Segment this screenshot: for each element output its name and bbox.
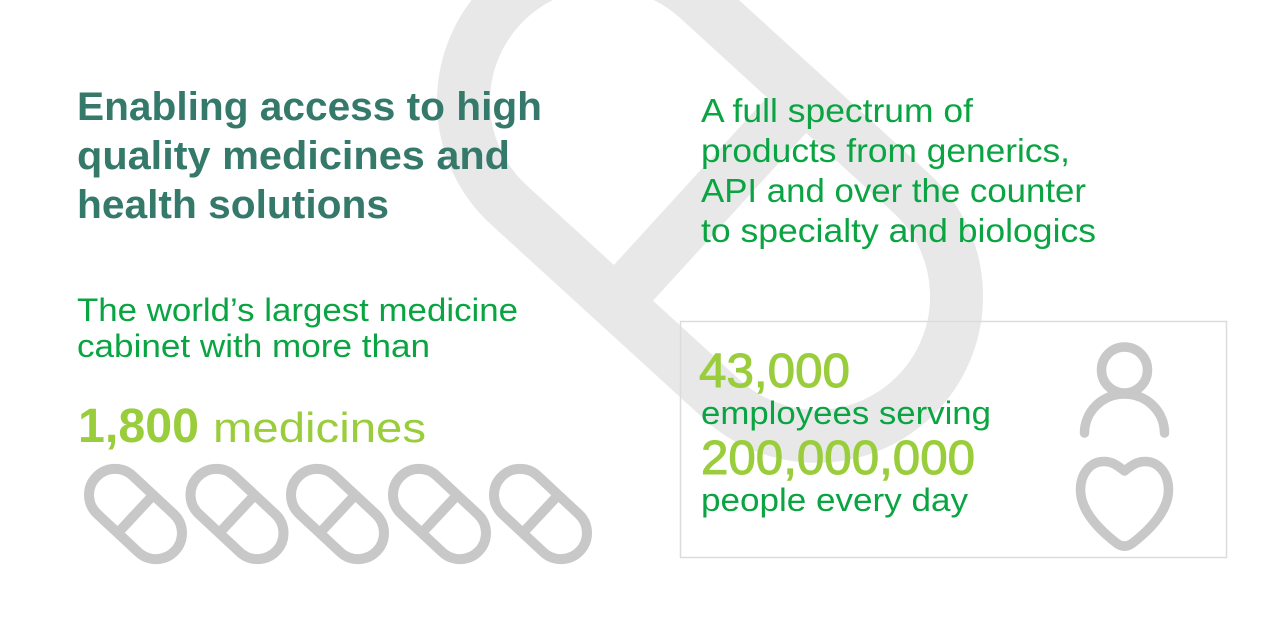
text block: people statistic — [701, 432, 975, 518]
text block: employees statistic: employees serving — [701, 395, 991, 431]
icon row: five capsules — [78, 458, 598, 570]
text block: medicine cabinet — [77, 292, 518, 364]
text block: full spectrum of products: to specialty and biologics — [701, 212, 1096, 249]
title: health solutions — [77, 183, 389, 227]
text block: full spectrum of products — [701, 92, 1096, 249]
text block: 1,800 medicines — [78, 400, 426, 453]
icon: capsule 3 — [280, 458, 395, 570]
icon: heart — [1080, 462, 1168, 546]
icon: capsule 4 — [382, 458, 497, 570]
icon: person — [1084, 347, 1164, 433]
text block: employees statistic — [699, 345, 991, 431]
text block: medicine cabinet: The world’s largest medicine — [77, 292, 518, 328]
text block: people statistic: people every day — [701, 482, 968, 518]
text block: people statistic: 200,000,000 — [701, 432, 975, 485]
title: Enabling access to high — [77, 85, 542, 129]
icon: capsule 1 — [78, 458, 193, 570]
text block: 1,800 medicines: 1,800 — [78, 400, 199, 453]
title: quality medicines and — [77, 134, 510, 178]
text block: full spectrum of products: products from generics, — [701, 132, 1070, 169]
icon: large background capsule — [406, 0, 1014, 494]
panel: statistics box — [680, 322, 1226, 558]
text block: medicine cabinet: cabinet with more than — [77, 328, 430, 364]
icon: capsule 2 — [180, 458, 294, 570]
text block: full spectrum of products: A full spectrum of — [701, 92, 974, 129]
title — [77, 85, 542, 227]
text block: 1,800 medicines: medicines — [213, 404, 426, 451]
text block: full spectrum of products: API and over the counter — [701, 172, 1086, 209]
icon: capsule 5 — [483, 458, 598, 570]
text block: employees statistic: 43,000 — [699, 345, 850, 398]
